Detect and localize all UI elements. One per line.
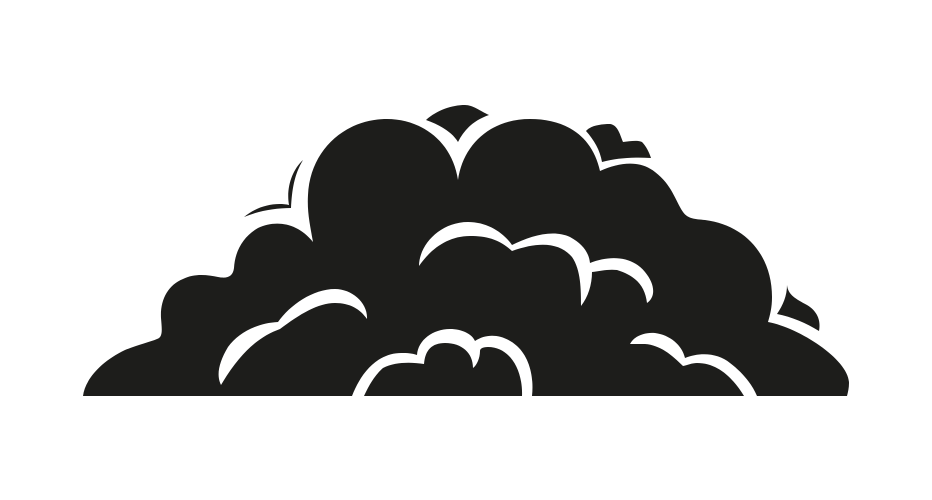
cloud main body	[83, 119, 849, 396]
cloud right small puff	[777, 285, 820, 331]
white highlight: bottom right crescent	[630, 333, 757, 396]
cloud top cap puff	[426, 105, 489, 142]
cloud left wisp	[244, 160, 303, 217]
cloud upper right puff	[586, 124, 651, 162]
white highlight: bottom center puff outline	[352, 329, 532, 396]
white highlight: left crescent	[219, 289, 367, 385]
white highlight: center upper crescent	[419, 222, 653, 306]
